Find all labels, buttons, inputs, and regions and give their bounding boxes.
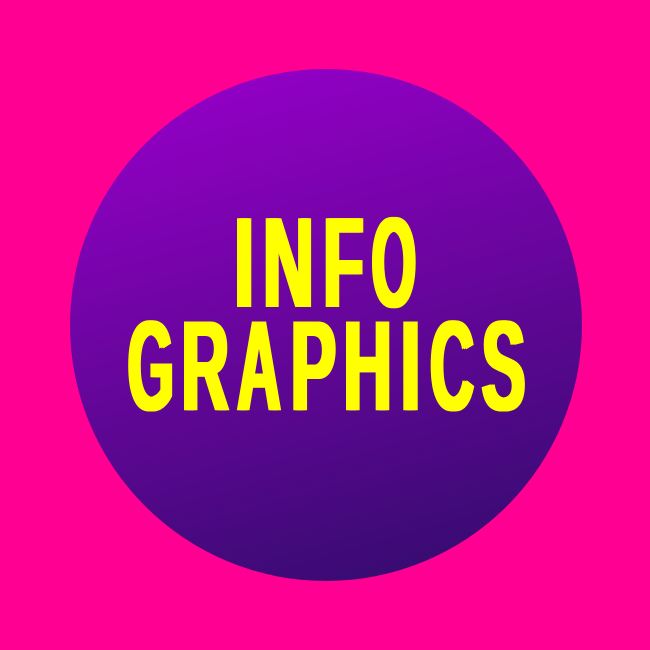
title line: GRAPHICS: A [237,294,281,438]
title line: GRAPHICS: P [291,294,336,438]
title line: INFO: N [263,191,314,335]
title line: GRAPHICS: R [182,294,229,438]
title line: GRAPHICS: H [344,294,392,438]
title line: GRAPHICS: S [482,294,525,438]
purple gradient circle [70,69,582,581]
title line: INFO: O [372,191,416,335]
title line: GRAPHICS: C [430,294,474,438]
title line: GRAPHICS [128,294,525,438]
title line: INFO: F [323,191,364,335]
title line: GRAPHICS: G [128,294,174,438]
title [128,191,525,438]
title line: GRAPHICS: I [400,294,421,438]
title line: INFO [234,191,416,335]
title line: INFO: I [234,191,254,335]
